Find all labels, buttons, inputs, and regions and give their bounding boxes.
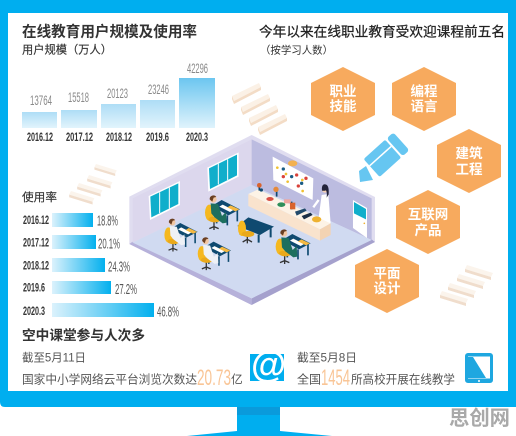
icon: pencil (359, 132, 409, 182)
watermark: 思创网 (449, 407, 510, 430)
lab bench (248, 189, 331, 241)
bar chart: usage rate: 27.2% (115, 282, 137, 298)
subtitle: by learners: （按学习人数） (260, 44, 333, 56)
student 1 (205, 195, 240, 230)
hexagon: vocational skills: 职业 (330, 84, 356, 99)
hexagon: graphic design: 平面 (374, 266, 400, 281)
hexagon: programming languages (392, 67, 456, 131)
text block: primary and secondary platform: 截至5月11日 (22, 350, 86, 364)
bar chart: user scale: 15518 (68, 89, 89, 105)
hexagon: internet products: 产品 (414, 222, 442, 238)
bar chart: usage rate: 18.8% (97, 214, 118, 230)
bar chart: usage rate: 20.1% (98, 236, 120, 252)
heading: air classroom: 空中课堂参与人次多 (22, 327, 145, 343)
text block: universities: 截至5月8日 (297, 350, 357, 364)
student 4 (276, 229, 311, 264)
poster: molecule chart (273, 157, 313, 200)
text block: primary and secondary platform: 20.73 (197, 365, 231, 390)
door (353, 200, 367, 238)
student 3 (198, 237, 231, 270)
subtitle: usage rate: 使用率 (22, 190, 57, 204)
bar chart: user scale: 2020.3 (186, 132, 208, 144)
text block: primary and secondary platform (22, 350, 243, 390)
bench equipment (257, 183, 321, 222)
bar chart: user scale: 2017.12 (66, 132, 93, 144)
icon: tablet (465, 353, 493, 383)
text block: primary and secondary platform: 国家中小学网络云平台浏览次数达 (22, 372, 197, 386)
classroom illustration (129, 135, 375, 305)
left window (149, 181, 180, 220)
subtitle: user scale: 用户规模（万人） (22, 42, 112, 56)
decorative stairs bottom right (440, 265, 493, 306)
title: popular courses: 今年以来在线职业教育受欢迎课程前五名 (259, 24, 505, 40)
hexagon: vocational skills: 技能 (330, 98, 357, 114)
middle window (207, 152, 239, 192)
bar chart: user scale: 23246 (148, 81, 169, 97)
bar chart: user scale: 2016.12 (27, 132, 53, 144)
bar chart: usage rate (23, 213, 179, 320)
hexagon: graphic design: 设计 (374, 281, 401, 296)
bar chart: usage rate: 2016.12 (23, 215, 49, 227)
hexagon: civil engineering: 工程 (456, 162, 483, 177)
teacher (313, 184, 331, 223)
bar chart: usage rate: 2018.12 (23, 260, 49, 272)
hexagon: graphic design (355, 249, 419, 313)
text block: universities: 1454 (321, 365, 350, 390)
text block: primary and secondary platform: 亿 (231, 372, 243, 386)
empty desk and chair (237, 217, 274, 243)
bar chart: user scale: 2019.6 (146, 132, 169, 144)
bar chart: user scale: 13764 (30, 92, 52, 108)
bar chart: usage rate: 46.8% (157, 304, 179, 320)
monitor stand (187, 405, 332, 436)
text block: universities: 全国 (297, 372, 321, 386)
bar chart: usage rate: 2017.12 (23, 238, 49, 250)
bar chart: usage rate: 24.3% (108, 260, 130, 276)
bar chart: user scale (22, 60, 215, 144)
hexagon: programming languages: 语言 (410, 98, 438, 114)
bar chart: usage rate: 2020.3 (23, 306, 45, 318)
hexagon: internet products: 互联网 (408, 207, 448, 222)
bar chart: usage rate: 2019.6 (23, 282, 45, 294)
decorative stairs top (232, 83, 287, 135)
hexagon: vocational skills (311, 67, 375, 131)
hexagon: civil engineering: 建筑 (456, 145, 483, 161)
hexagon: internet products (396, 190, 460, 254)
student 2 (164, 219, 198, 251)
decorative stairs left (69, 164, 117, 204)
bar chart: user scale: 20123 (107, 85, 128, 101)
bar chart: user scale: 42296 (187, 60, 208, 76)
room shell (129, 135, 375, 305)
text block: universities: 所高校开展在线教学 (351, 372, 455, 386)
title: online education users: 在线教育用户规模及使用率 (22, 22, 197, 40)
bar chart: user scale: 2018.12 (106, 132, 132, 144)
text block: universities (297, 350, 455, 390)
hexagon: civil engineering (437, 129, 501, 193)
icon: at sign: @ (250, 344, 286, 385)
hexagon: programming languages: 编程 (410, 83, 438, 99)
